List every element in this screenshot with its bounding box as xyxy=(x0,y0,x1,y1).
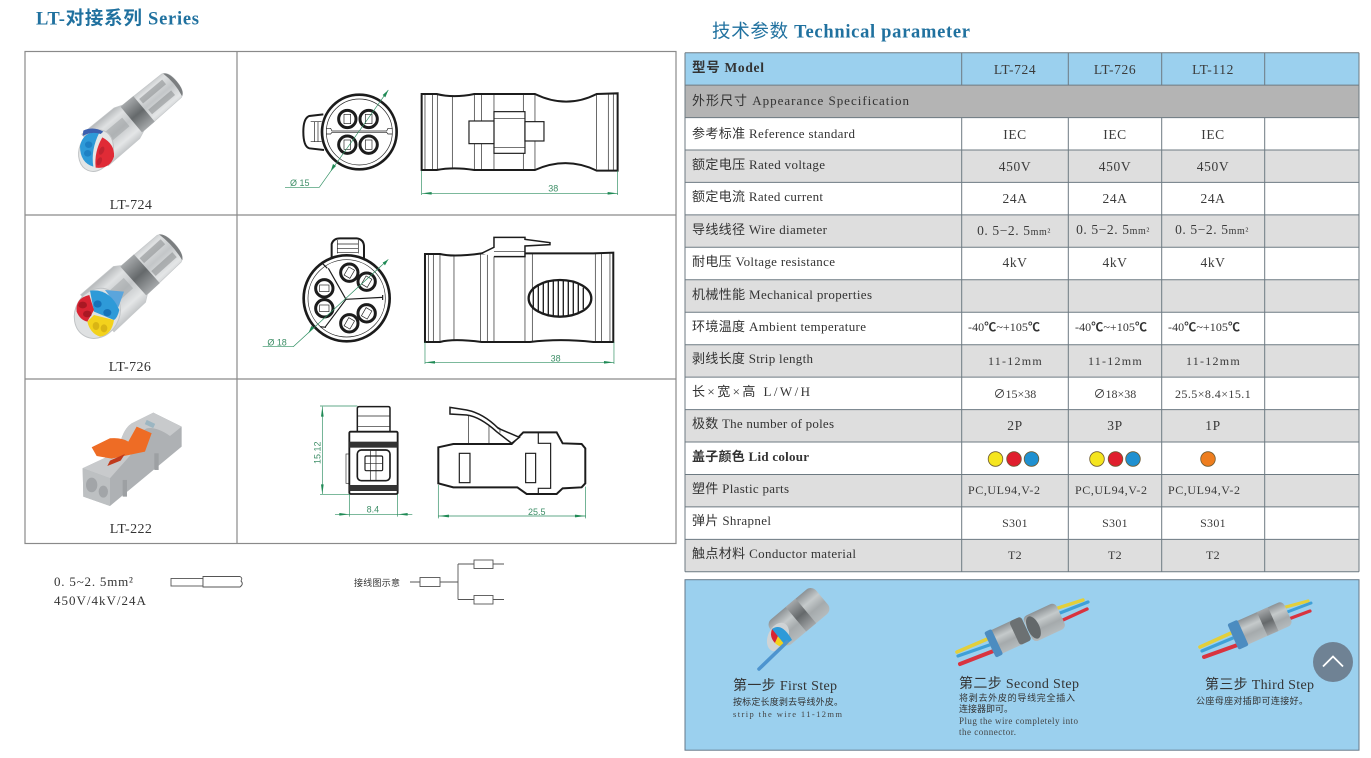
diagram: wiring schematic xyxy=(410,560,504,604)
row: ambient temperature: -40℃~+105℃ xyxy=(1075,320,1147,334)
panel: installation steps xyxy=(685,580,1359,750)
button: scroll to top xyxy=(1313,642,1353,682)
drawing: LT-726 end view: Ø 18 xyxy=(267,337,287,347)
step two text: the connector. xyxy=(959,727,1016,737)
row: dimensions: 25.5×8.4×15.1 xyxy=(1175,387,1251,401)
drawing: LT-222 front view: 15.12 xyxy=(313,442,323,464)
row: ambient temperature: -40℃~+105℃ xyxy=(968,320,1040,334)
row: strip length: 剥线长度 Strip length xyxy=(692,351,814,366)
row: wire diameter: 导线线径 Wire diameter xyxy=(692,222,828,237)
row: wire diameter: 0. 5−2. 5mm² xyxy=(1076,222,1150,237)
row: model xyxy=(692,60,1234,77)
row: conductor material: 触点材料 Conductor material xyxy=(692,546,856,561)
row: voltage resistance: 4kV xyxy=(1102,255,1128,270)
step two text xyxy=(959,675,1079,737)
row: dimensions xyxy=(692,384,1251,401)
drawing: LT-726 end view xyxy=(263,238,390,347)
row: mechanical properties: 机械性能 Mechanical properties xyxy=(692,287,872,302)
row: model: LT-726 xyxy=(1094,62,1136,77)
illustration: second step connector pair xyxy=(957,600,1088,664)
row: shrapnel: 弹片 Shrapnel xyxy=(692,513,771,528)
step three text: 公座母座对插即可连接好。 xyxy=(1196,695,1308,706)
row: dimensions: ∅18×38 xyxy=(1094,387,1136,401)
row: rated current: 24A xyxy=(1200,191,1226,206)
row: appearance specification: 外形尺寸 Appearance Specification xyxy=(692,93,910,108)
text: wiring diagram label: 接线图示意 xyxy=(354,576,400,589)
row: strip length: 11-12mm xyxy=(1088,354,1142,368)
row: rated voltage: 450V xyxy=(1197,159,1229,174)
row: plastic parts xyxy=(692,481,1240,497)
row: plastic parts: PC,UL94,V-2 xyxy=(1168,483,1240,497)
title: technical parameter heading: 技术参数 Technical parameter xyxy=(712,22,970,42)
row: wire diameter: 0. 5−2. 5mm² xyxy=(977,223,1051,238)
row: voltage resistance: 4kV xyxy=(1200,255,1226,270)
step two text: 将剥去外皮的导线完全插入 xyxy=(959,692,1075,703)
row: dimensions: 长×宽×高 L/W/H xyxy=(692,384,810,399)
text: ratings: 450V/4kV/24A xyxy=(54,593,147,608)
drawing: LT-724 end view: Ø 15 xyxy=(290,178,309,188)
row: rated current: 24A xyxy=(1002,191,1028,206)
row: plastic parts: 塑件 Plastic parts xyxy=(692,481,789,496)
illustration: first step connector xyxy=(759,585,832,669)
label: LT-724: LT-724 xyxy=(110,198,152,213)
row: ambient temperature: -40℃~+105℃ xyxy=(1168,320,1240,334)
drawing: LT-724 side view: 38 xyxy=(548,184,558,194)
row: voltage resistance: 耐电压 Voltage resistance xyxy=(692,254,835,269)
illustration: third step assembled connector xyxy=(1200,600,1311,657)
row: number of poles: 1P xyxy=(1205,418,1221,433)
row: plastic parts: PC,UL94,V-2 xyxy=(968,483,1040,497)
photo: LT-222 connector xyxy=(83,413,182,506)
text: wire specification: 0. 5~2. 5mm² xyxy=(54,574,134,589)
row: rated current: 24A xyxy=(1102,191,1128,206)
row: wire diameter: 0. 5−2. 5mm² xyxy=(1175,222,1249,237)
row: rated current: 额定电流 Rated current xyxy=(692,189,823,204)
drawing: LT-222 side view xyxy=(438,407,586,518)
drawing: LT-726 side view: 38 xyxy=(551,353,561,363)
row: shrapnel: S301 xyxy=(1002,516,1028,530)
row: reference standard: 参考标准 Reference standard xyxy=(692,126,856,141)
drawing: LT-726 side view xyxy=(425,237,614,364)
drawing: LT-222 side view: 25.5 xyxy=(528,507,545,517)
row: shrapnel: S301 xyxy=(1200,516,1226,530)
photo: LT-724 connector xyxy=(73,66,190,177)
row: rated voltage: 450V xyxy=(999,159,1031,174)
row: conductor material xyxy=(692,546,1220,562)
row: lid colour: 盖子颜色 Lid colour xyxy=(692,449,809,464)
row: conductor material: T2 xyxy=(1008,548,1022,562)
icon: stripped wire xyxy=(171,576,242,587)
row: ambient temperature: 环境温度 Ambient temperature xyxy=(692,319,866,334)
step three text xyxy=(1196,676,1314,706)
label: LT-726: LT-726 xyxy=(109,360,151,375)
panel: product table xyxy=(25,52,676,544)
row: voltage resistance xyxy=(692,254,1226,270)
row: voltage resistance: 4kV xyxy=(1002,255,1028,270)
table: technical parameters xyxy=(685,53,1359,572)
title: series heading: LT-对接系列 Series xyxy=(36,8,199,30)
row: shrapnel xyxy=(692,513,1226,530)
label: LT-222: LT-222 xyxy=(110,522,152,537)
row: strip length: 11-12mm xyxy=(1186,354,1240,368)
row: strip length xyxy=(692,351,1240,368)
row: rated voltage: 额定电压 Rated voltage xyxy=(692,157,825,172)
photo: LT-726 connector xyxy=(65,225,191,347)
row: model: LT-724 xyxy=(994,62,1036,77)
drawing: LT-222 front view xyxy=(313,406,412,517)
row: plastic parts: PC,UL94,V-2 xyxy=(1075,483,1147,497)
row: model: 型号 Model xyxy=(692,60,764,75)
drawing: LT-724 end view xyxy=(285,90,397,188)
step three text: 第三步 Third Step xyxy=(1205,676,1314,693)
row: lid colour xyxy=(692,449,1215,466)
row: reference standard: IEC xyxy=(1003,127,1027,142)
row: reference standard xyxy=(692,126,1225,142)
row: wire diameter xyxy=(692,222,1249,238)
row: rated voltage: 450V xyxy=(1099,159,1131,174)
step two text: 连接器即可。 xyxy=(959,703,1013,714)
row: number of poles: 3P xyxy=(1107,418,1123,433)
step one text: 第一步 First Step xyxy=(733,677,837,694)
row: conductor material: T2 xyxy=(1206,548,1220,562)
row: shrapnel: S301 xyxy=(1102,516,1128,530)
row: ambient temperature xyxy=(692,319,1240,334)
row: number of poles: 2P xyxy=(1007,418,1023,433)
row: number of poles xyxy=(692,416,1221,433)
row: conductor material: T2 xyxy=(1108,548,1122,562)
step one text: 按标定长度剥去导线外皮。 xyxy=(733,696,843,707)
drawing: LT-222 front view: 8.4 xyxy=(367,505,379,515)
row: dimensions: ∅15×38 xyxy=(994,387,1036,401)
step one text xyxy=(733,677,843,719)
row: rated voltage xyxy=(692,157,1229,174)
step one text: strip the wire 11-12mm xyxy=(733,709,842,719)
row: model: LT-112 xyxy=(1192,62,1234,77)
row: reference standard: IEC xyxy=(1201,127,1225,142)
step two text: Plug the wire completely into xyxy=(959,716,1078,726)
row: strip length: 11-12mm xyxy=(988,354,1042,368)
row: rated current xyxy=(692,189,1226,206)
row: number of poles: 极数 The number of poles xyxy=(692,416,834,431)
step two text: 第二步 Second Step xyxy=(959,675,1079,692)
row: reference standard: IEC xyxy=(1103,127,1127,142)
drawing: LT-724 side view xyxy=(422,93,618,195)
